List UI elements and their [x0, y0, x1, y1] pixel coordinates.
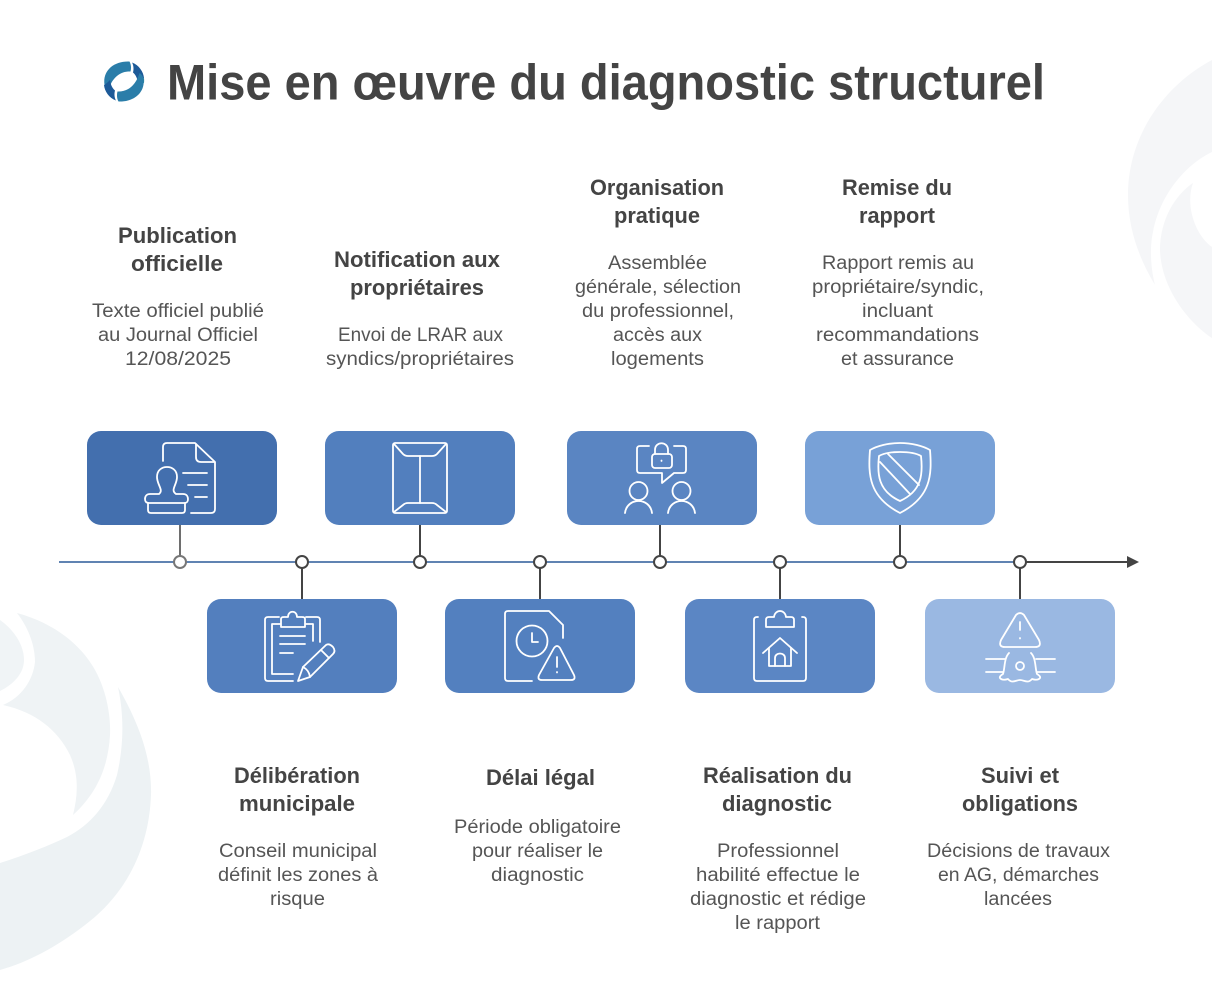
- description: [218, 841, 378, 910]
- node: [174, 556, 186, 568]
- description: incluant: [862, 301, 934, 322]
- description: définit les zones à: [218, 865, 378, 886]
- description: [927, 841, 1111, 910]
- heading: [703, 763, 852, 816]
- connector: [899, 525, 901, 556]
- description: générale, sélection: [575, 277, 741, 298]
- icon: stamp and document: [145, 443, 215, 513]
- icon: document, clock and warning: [505, 611, 575, 681]
- card: [325, 431, 515, 525]
- card: [207, 599, 397, 693]
- description: syndics/propriétaires: [326, 349, 514, 370]
- heading: Notification aux: [334, 247, 501, 272]
- description: habilité effectue le: [696, 865, 860, 886]
- heading: obligations: [962, 791, 1078, 816]
- connector: [179, 525, 181, 556]
- step: Suivi et obligations: [925, 556, 1115, 910]
- connector: [1019, 568, 1021, 599]
- description: propriétaire/syndic,: [812, 277, 984, 298]
- heading: [590, 175, 724, 228]
- description: diagnostic et rédige: [690, 889, 866, 910]
- heading: Délai légal: [486, 765, 595, 790]
- connector: [301, 568, 303, 599]
- heading: officielle: [131, 251, 223, 276]
- node: [894, 556, 906, 568]
- node: [296, 556, 308, 568]
- timeline: [59, 556, 1139, 568]
- description: logements: [611, 349, 704, 370]
- card: [925, 599, 1115, 693]
- icon: warning and leaking pipe: [986, 613, 1055, 682]
- icon: shield: [869, 443, 931, 513]
- step: Délai légal: [445, 556, 635, 886]
- card: [685, 599, 875, 693]
- card: [567, 431, 757, 525]
- description: [92, 301, 264, 370]
- heading: [234, 763, 360, 816]
- node: [654, 556, 666, 568]
- description: Envoi de LRAR aux: [338, 325, 503, 346]
- description: Professionnel: [717, 841, 839, 862]
- connector: [419, 525, 421, 556]
- description: du professionnel,: [582, 301, 734, 322]
- step: Notification aux propriétaires: [325, 247, 515, 568]
- description: recommandations: [816, 325, 979, 346]
- heading: Remise du: [842, 175, 952, 200]
- card: [87, 431, 277, 525]
- description: diagnostic: [491, 865, 584, 886]
- heading: Réalisation du: [703, 763, 852, 788]
- connector: [539, 568, 541, 599]
- description: pour réaliser le: [472, 841, 603, 862]
- heading: Publication: [118, 223, 237, 248]
- description: 12/08/2025: [125, 349, 231, 370]
- node: [774, 556, 786, 568]
- description: [690, 841, 866, 934]
- description: [812, 253, 984, 370]
- card: [445, 599, 635, 693]
- description: Conseil municipal: [219, 841, 377, 862]
- heading: rapport: [859, 203, 936, 228]
- description: [575, 253, 741, 370]
- description: Période obligatoire: [454, 817, 621, 838]
- heading: diagnostic: [722, 791, 832, 816]
- heading: [962, 763, 1078, 816]
- step: Organisation pratique: [567, 175, 757, 568]
- heading: municipale: [239, 791, 355, 816]
- logo: [104, 61, 144, 102]
- description: Texte officiel publié: [92, 301, 264, 322]
- description: accès aux: [613, 325, 703, 346]
- connector: [779, 568, 781, 599]
- description: au Journal Officiel: [98, 325, 258, 346]
- heading: pratique: [614, 203, 700, 228]
- description: en AG, démarches: [938, 865, 1099, 886]
- icon: clipboard and house: [754, 611, 806, 681]
- description: Rapport remis au: [822, 253, 974, 274]
- watermark: top right: [1128, 60, 1212, 338]
- step: Publication officielle: [87, 223, 277, 568]
- heading: Délibération: [234, 763, 360, 788]
- node: [414, 556, 426, 568]
- description: [326, 325, 514, 370]
- node: [534, 556, 546, 568]
- heading: [842, 175, 952, 228]
- icon: envelope: [393, 443, 447, 513]
- icon: locked chat and two people: [625, 443, 695, 513]
- watermark: bottom left: [0, 613, 151, 970]
- node: [1014, 556, 1026, 568]
- description: [454, 817, 621, 886]
- heading: Organisation: [590, 175, 724, 200]
- heading: [334, 247, 501, 300]
- step: Réalisation du diagnostic: [685, 556, 875, 934]
- description: risque: [270, 889, 325, 910]
- description: lancées: [984, 889, 1052, 910]
- description: et assurance: [841, 349, 954, 370]
- title: Mise en œuvre du diagnostic structurel: [167, 54, 1045, 110]
- heading: propriétaires: [350, 275, 484, 300]
- icon: clipboard and pencil: [265, 612, 334, 681]
- description: Décisions de travaux: [927, 841, 1111, 862]
- description: le rapport: [735, 913, 821, 934]
- step: Délibération municipale: [207, 556, 397, 910]
- card: [805, 431, 995, 525]
- connector: [659, 525, 661, 556]
- heading: Suivi et: [981, 763, 1060, 788]
- description: Assemblée: [608, 253, 707, 274]
- step: Remise du rapport: [805, 175, 995, 568]
- heading: [118, 223, 237, 276]
